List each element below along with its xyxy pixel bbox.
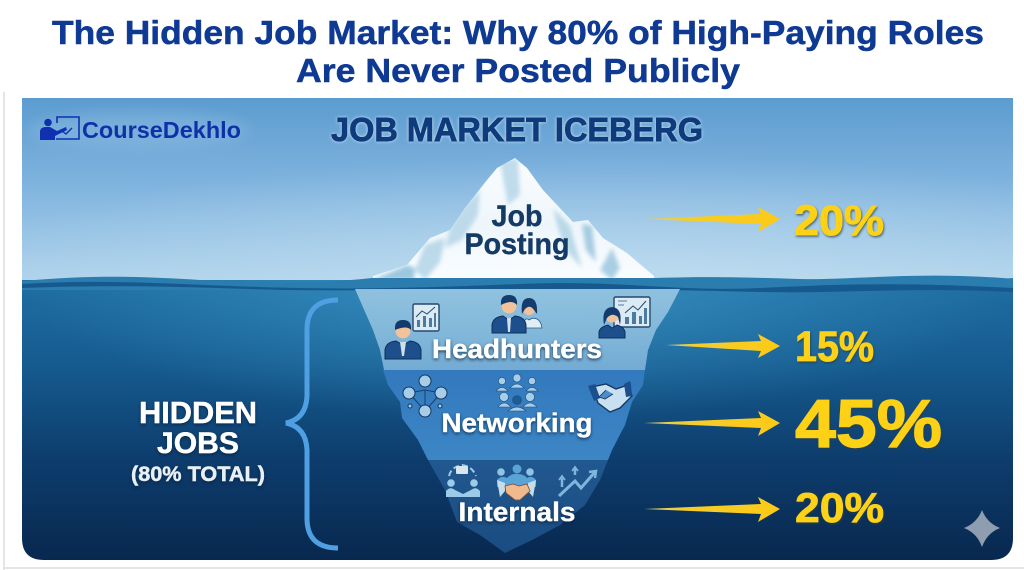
icon: presenter at board	[40, 117, 79, 140]
icons: headhunters row	[385, 295, 650, 359]
icon: people network	[403, 375, 447, 417]
panel: iceberg scene	[22, 98, 1013, 560]
logo: CourseDekhlo: CourseDekhlo	[82, 117, 241, 143]
title	[52, 14, 984, 89]
label: job posting: Posting	[464, 228, 570, 261]
icon: sparkle	[964, 510, 1000, 547]
value: 20% bottom: 20%	[795, 484, 884, 531]
sky background	[22, 98, 1013, 288]
icon: team group	[496, 374, 538, 411]
brace	[286, 300, 338, 548]
waterline	[22, 276, 1013, 292]
arrow: job posting	[644, 207, 780, 232]
value: 20% top: 20%	[794, 197, 884, 245]
label: job posting: Job	[492, 200, 542, 233]
title: Are Never Posted Publicly	[296, 52, 741, 89]
arrow: headhunters	[666, 334, 780, 358]
icon: woman with chart	[599, 297, 650, 338]
icons: networking row	[403, 374, 632, 417]
icon: handshake outline	[588, 381, 632, 412]
value: 45%: 45%	[795, 386, 942, 462]
logo: CourseDekhlo	[30, 112, 250, 148]
icon: business pair	[492, 295, 542, 333]
sea background	[22, 280, 1013, 560]
iceberg layer: headhunters	[355, 289, 680, 370]
icon: two people discussing	[446, 465, 480, 497]
arrow: internals	[644, 497, 780, 522]
iceberg tip	[370, 155, 660, 283]
iceberg layer: internals	[428, 460, 608, 553]
label: hidden jobs: (80% TOTAL)	[131, 463, 265, 486]
value: 15%: 15%	[795, 323, 874, 371]
arrow: networking	[644, 411, 780, 436]
label: hidden jobs: JOBS	[157, 427, 239, 460]
label: hidden jobs	[131, 395, 265, 486]
label: job posting	[466, 204, 568, 260]
label: networking: Networking	[442, 408, 592, 438]
icon: growth arrow	[559, 467, 596, 496]
label: hidden jobs: HIDDEN	[139, 395, 257, 430]
iceberg layer: networking	[383, 370, 645, 460]
title: The Hidden Job Market: Why 80% of High-Paying Roles	[52, 14, 984, 51]
icon: man with chart	[385, 304, 439, 359]
label: headhunters: Headhunters	[432, 334, 602, 364]
label: internals: Internals	[458, 497, 576, 527]
icon: group handshake	[497, 464, 536, 500]
icons: internals row	[446, 464, 596, 500]
heading: job market iceberg: JOB MARKET ICEBERG	[331, 111, 703, 148]
